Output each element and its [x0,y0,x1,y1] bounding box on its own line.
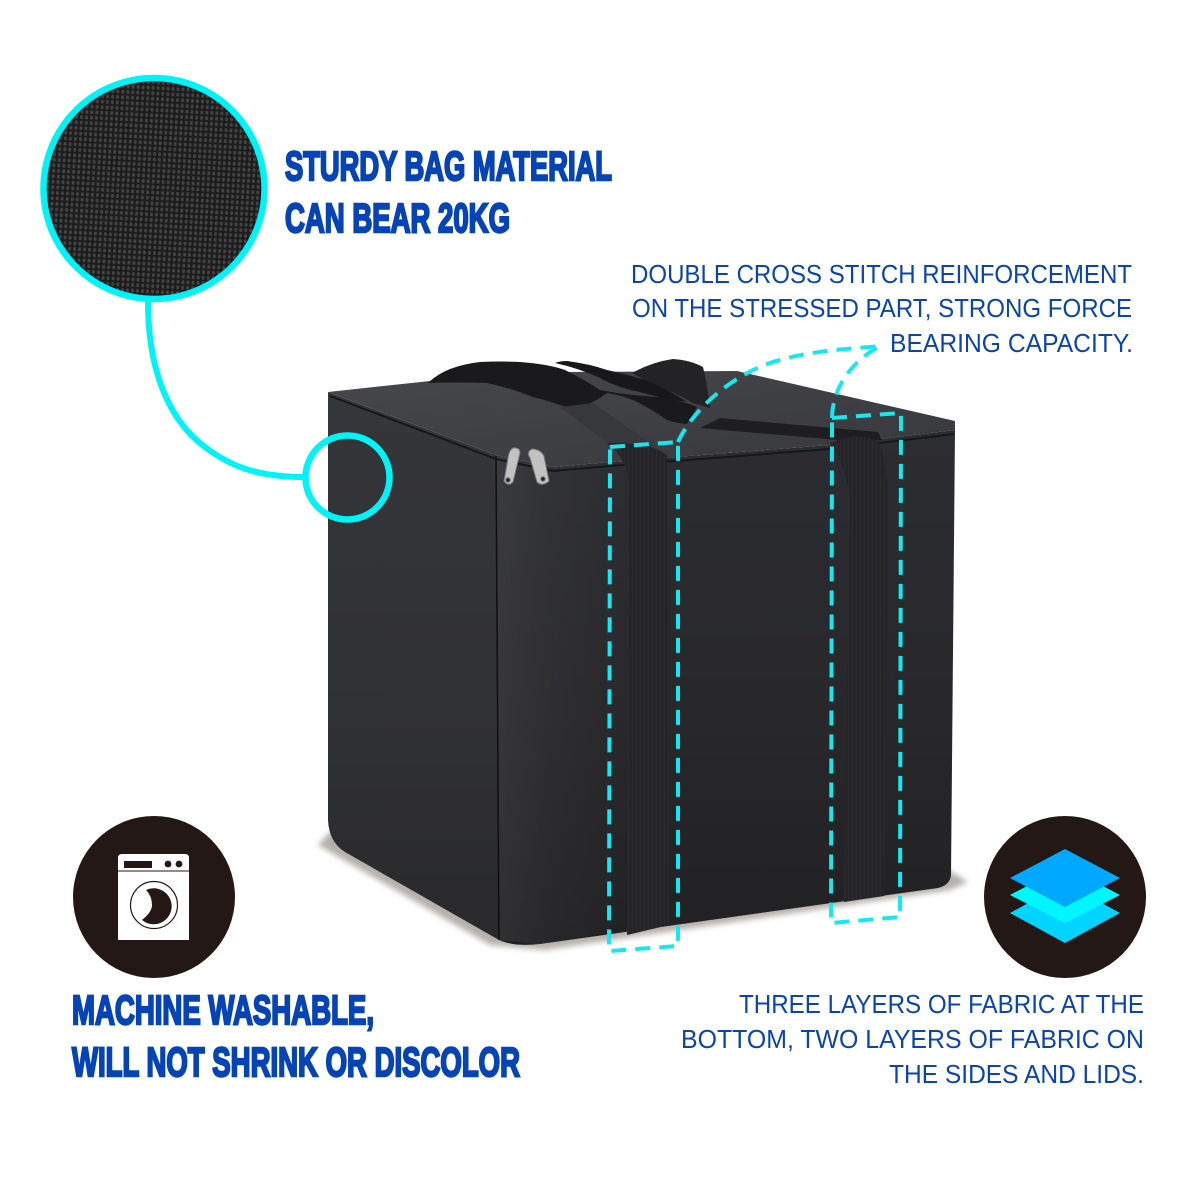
callout curve to right box [832,346,880,418]
zoom target ring [306,436,390,520]
text: stitch reinforcement [631,259,1133,358]
heading: machine washable: MACHINE WASHABLE, [72,987,374,1033]
text: fabric layers [681,989,1144,1089]
lid seams [330,396,954,471]
dashed stitch outlines [609,346,901,951]
right stitch box [831,413,901,923]
text: stitch reinforcement: DOUBLE CROSS STITCH REINFORCEMENT [631,259,1132,289]
bag lid [328,371,955,467]
heading: sturdy material: STURDY BAG MATERIAL [285,143,612,189]
text: fabric layers: THREE LAYERS OF FABRIC AT THE [739,989,1144,1019]
bag front face [496,430,955,945]
front face sheen [496,430,955,944]
bag photo [318,359,968,950]
text: fabric layers: BOTTOM, TWO LAYERS OF FABRIC ON [681,1024,1144,1054]
icon: fabric layers [984,816,1146,978]
heading: machine washable [72,987,520,1085]
rear handle loop [555,361,687,402]
rear handle band [632,359,710,408]
connector line [148,302,305,477]
front handle [428,362,697,424]
icon: washing machine [73,816,235,978]
heading: sturdy material [285,143,612,241]
magnified fabric circle [44,78,264,299]
heading: sturdy material: CAN BEAR 20KG [285,195,510,241]
text: stitch reinforcement: ON THE STRESSED PART, STRONG FORCE [632,293,1132,323]
bag left face [328,392,499,940]
right strap [830,436,889,902]
callout curve to left box [678,346,880,442]
left strap [607,443,669,935]
left stitch box [609,442,678,951]
text: stitch reinforcement: BEARING CAPACITY. [890,328,1133,358]
callout: sturdy fabric magnifier [44,78,390,520]
text: fabric layers: THE SIDES AND LIDS. [889,1059,1144,1089]
bag floor shadow [318,832,968,950]
zipper pulls [504,448,549,484]
strap across lid [560,403,667,455]
heading: machine washable: WILL NOT SHRINK OR DISCOLOR [72,1039,520,1085]
